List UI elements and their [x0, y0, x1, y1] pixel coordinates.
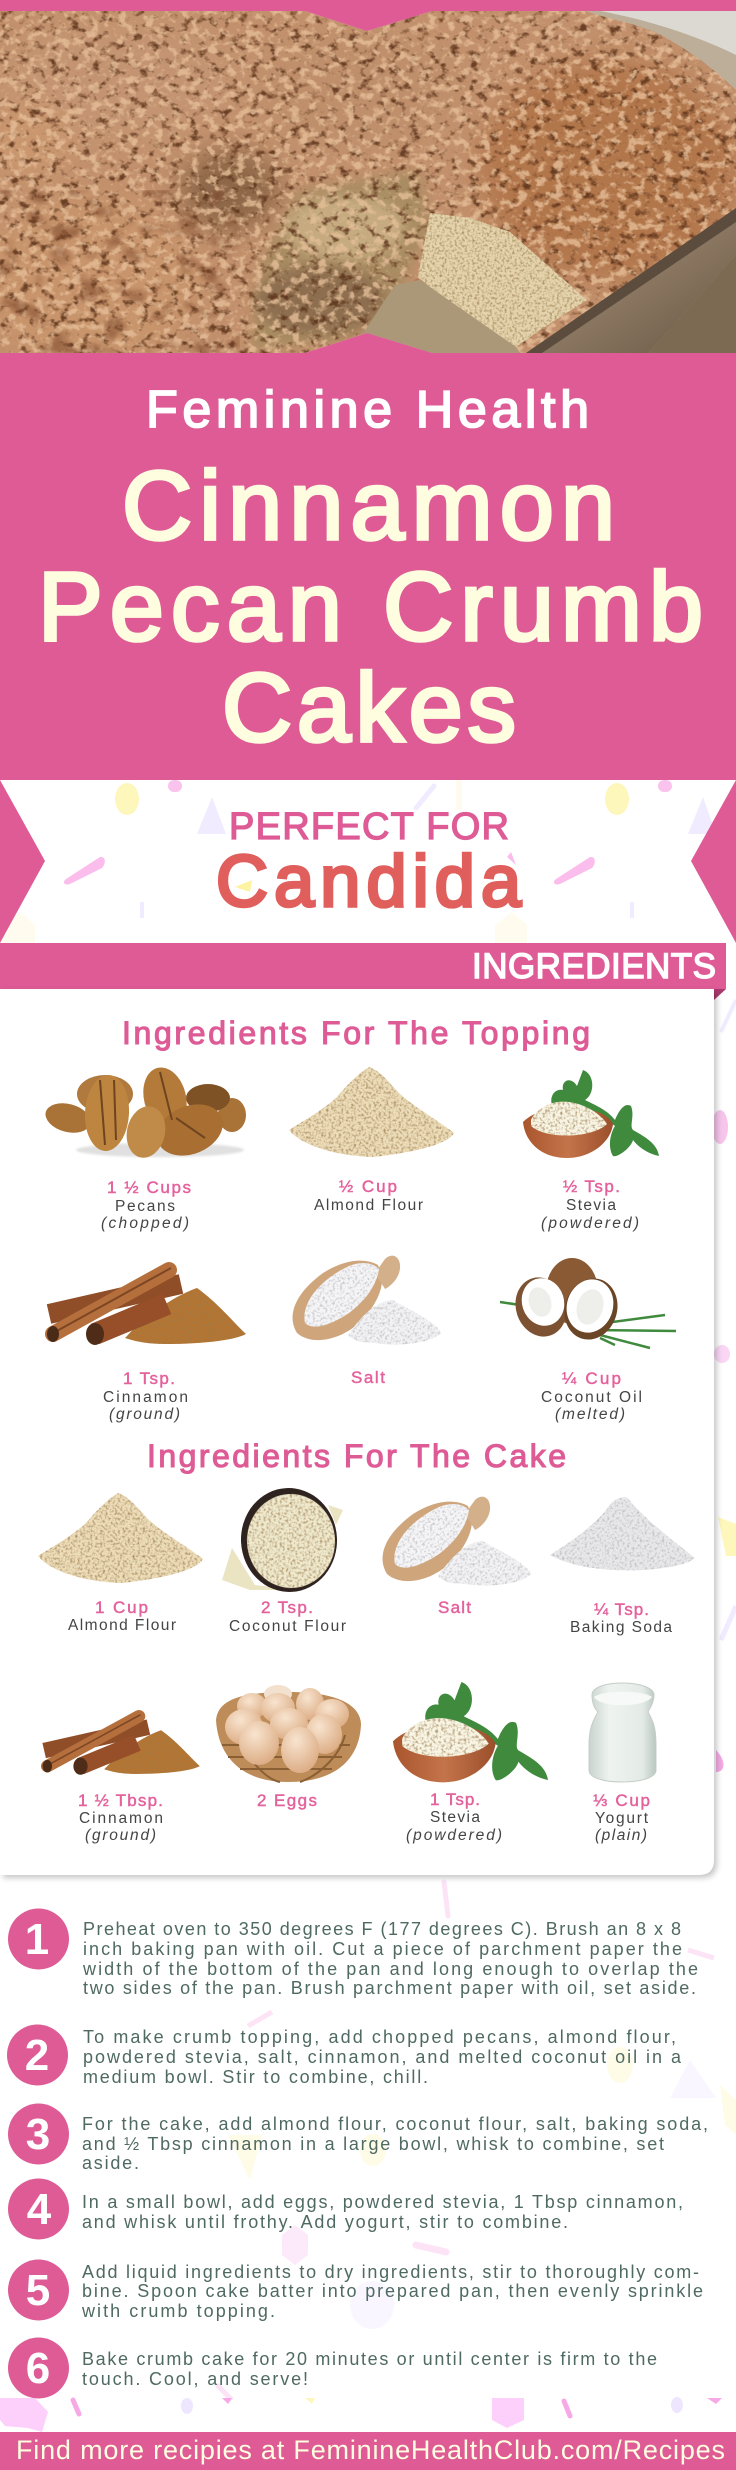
icon: salt scoop	[383, 1497, 531, 1586]
amount: almond flour	[68, 1598, 176, 1634]
burlap under cake	[350, 280, 520, 353]
amount: pecans: (chopped)	[101, 1215, 189, 1232]
amount: pecans	[101, 1178, 191, 1232]
step 5: bine. Spoon cake batter into prepared pan, then evenly sprinkle	[82, 2281, 703, 2301]
step 4: In a small bowl, add eggs, powdered stevia, 1 Tbsp cinnamon,	[82, 2192, 683, 2212]
amount: almond flour: Almond Flour	[314, 1197, 423, 1214]
step 6: touch. Cool, and serve!	[82, 2369, 308, 2389]
icon: almond flour	[289, 1067, 454, 1157]
amount: coconut oil: Coconut Oil	[541, 1389, 642, 1406]
cake cut face	[418, 213, 587, 347]
amount: stevia: (powdered)	[541, 1215, 639, 1232]
icon: pecans	[42, 1063, 246, 1165]
icon: baking soda	[550, 1497, 695, 1570]
icon: stevia bowl	[393, 1682, 548, 1782]
icon: yogurt jar	[589, 1683, 656, 1782]
baking pan edge	[526, 208, 736, 353]
candida heading: Candida	[216, 842, 522, 922]
icon: salt scoop	[293, 1256, 441, 1345]
amount: cinnamon: 1 Tsp.	[123, 1369, 175, 1388]
amount: cinnamon: (ground)	[109, 1406, 180, 1423]
amount: yogurt: ⅓ Cup	[593, 1791, 650, 1810]
title line 3: Cakes	[222, 653, 516, 762]
step 2: medium bowl. Stir to combine, chill.	[83, 2067, 428, 2087]
left ribbon fold	[0, 780, 45, 943]
step 4: 4	[27, 2185, 52, 2234]
step 4	[8, 2178, 683, 2240]
subtitle: Feminine Health: Feminine Health	[146, 381, 589, 439]
step 3: 3	[26, 2110, 50, 2159]
step 1: Preheat oven to 350 degrees F (177 degrees C). Brush an 8 x 8	[83, 1919, 681, 1939]
step 5: 5	[26, 2266, 50, 2315]
amount: cinnamon: Cinnamon	[103, 1389, 188, 1406]
step 1: two sides of the pan. Brush parchment paper with oil, set aside.	[83, 1978, 696, 1998]
amount: baking soda	[570, 1600, 672, 1636]
amount: cinnamon	[78, 1791, 163, 1844]
amount: cinnamon: (ground)	[85, 1827, 156, 1844]
step 4: and whisk until frothy. Add yogurt, stir to combine.	[82, 2212, 568, 2232]
step 2	[7, 2024, 682, 2087]
step 2: To make crumb topping, add chopped pecans, almond flour,	[83, 2027, 676, 2047]
amount: coconut flour: 2 Tsp.	[261, 1598, 313, 1617]
icon: stevia bowl	[523, 1070, 659, 1158]
amount: cinnamon: 1 ½ Tbsp.	[78, 1791, 163, 1810]
step 1: 1	[25, 1915, 49, 1964]
icon: coconut flour	[222, 1486, 343, 1594]
icon: coconut	[500, 1258, 676, 1348]
step 1: inch baking pan with oil. Cut a piece of parchment paper the	[83, 1939, 682, 1959]
amount: yogurt: (plain)	[595, 1827, 647, 1844]
step 5: Add liquid ingredients to dry ingredients, stir to thoroughly com-	[82, 2262, 699, 2282]
footer banner: Find more recipies at FeminineHealthClub.com/Recipes	[16, 2435, 725, 2465]
amount: baking soda: ¼ Tsp.	[594, 1600, 649, 1619]
icon: cinnamon	[47, 1268, 246, 1345]
amount: almond flour: Almond Flour	[68, 1617, 176, 1634]
amount: salt: Salt	[351, 1368, 385, 1387]
right ribbon fold	[691, 780, 736, 943]
icon: almond flour	[38, 1493, 203, 1583]
amount: pecans: Pecans	[115, 1198, 175, 1215]
amount: baking soda: Baking Soda	[570, 1619, 672, 1636]
ingredients tab: INGREDIENTS	[472, 947, 716, 986]
amount: coconut flour	[229, 1598, 346, 1635]
step 3: For the cake, add almond flour, coconut flour, salt, baking soda,	[82, 2114, 708, 2134]
title line 2: Pecan Crumb	[38, 552, 703, 661]
icon: cinnamon	[43, 1715, 200, 1775]
amount: almond flour	[314, 1177, 423, 1214]
amount: stevia: ½ Tsp.	[563, 1177, 620, 1196]
amount: stevia	[406, 1790, 502, 1844]
step 2: 2	[25, 2031, 49, 2080]
ingredients tab	[0, 943, 726, 1000]
amount: coconut oil: ¼ Cup	[562, 1369, 621, 1388]
step 3	[8, 2104, 708, 2173]
title line 1: Cinnamon	[122, 451, 615, 560]
icon: basket of eggs	[216, 1685, 361, 1782]
confetti: bottom strip	[0, 2397, 722, 2432]
step 6	[8, 2338, 657, 2398]
ribbon confetti	[0, 780, 716, 943]
amount: almond flour: ½ Cup	[339, 1177, 397, 1196]
background confetti behind steps	[0, 1882, 736, 2432]
perfect for heading: PERFECT FOR	[229, 806, 509, 848]
step 3: and ½ Tbsp cinnamon in a large bowl, whisk to combine, set	[82, 2134, 664, 2154]
exposed cake interior	[250, 170, 430, 350]
amount: almond flour: 1 Cup	[95, 1598, 148, 1617]
amount: stevia: Stevia	[430, 1809, 480, 1826]
amount: coconut oil: (melted)	[555, 1406, 625, 1423]
step 6: 6	[26, 2344, 50, 2393]
heading: cake: Ingredients For The Cake	[147, 1438, 566, 1474]
title panel	[0, 333, 736, 780]
amount: coconut flour: Coconut Flour	[229, 1618, 346, 1635]
hero photo of crumb cake	[0, 0, 736, 360]
amount: stevia: Stevia	[566, 1197, 616, 1214]
step 1	[8, 1908, 698, 1998]
step 6: Bake crumb cake for 20 minutes or until center is firm to the	[82, 2349, 657, 2369]
amount: yogurt	[593, 1791, 650, 1844]
ribbon banner: perfect for candida	[0, 780, 736, 943]
amount: yogurt: Yogurt	[595, 1810, 649, 1827]
top pink band with notch	[0, 0, 736, 31]
ingredients card	[0, 989, 714, 1875]
step 5	[8, 2260, 703, 2321]
heading: topping: Ingredients For The Topping	[122, 1015, 590, 1051]
amount: coconut oil	[541, 1369, 642, 1423]
amount: eggs: 2 Eggs	[257, 1791, 317, 1810]
right-side confetti beside card	[712, 1000, 736, 1772]
amount: pecans: 1 ½ Cups	[107, 1178, 191, 1197]
amount: stevia	[541, 1177, 639, 1232]
amount: cinnamon	[103, 1369, 188, 1423]
amount: stevia: 1 Tsp.	[430, 1790, 480, 1809]
amount: cinnamon: Cinnamon	[79, 1810, 163, 1827]
step 2: powdered stevia, salt, cinnamon, and melted coconut oil in a	[83, 2047, 682, 2067]
amount: salt: Salt	[438, 1598, 471, 1617]
step 5: with crumb topping.	[81, 2301, 275, 2321]
step 1: width of the bottom of the pan and long enough to overlap the	[82, 1959, 698, 1979]
amount: stevia: (powdered)	[406, 1827, 502, 1844]
parchment foil corner	[585, 11, 736, 90]
step 3: aside.	[82, 2153, 139, 2173]
